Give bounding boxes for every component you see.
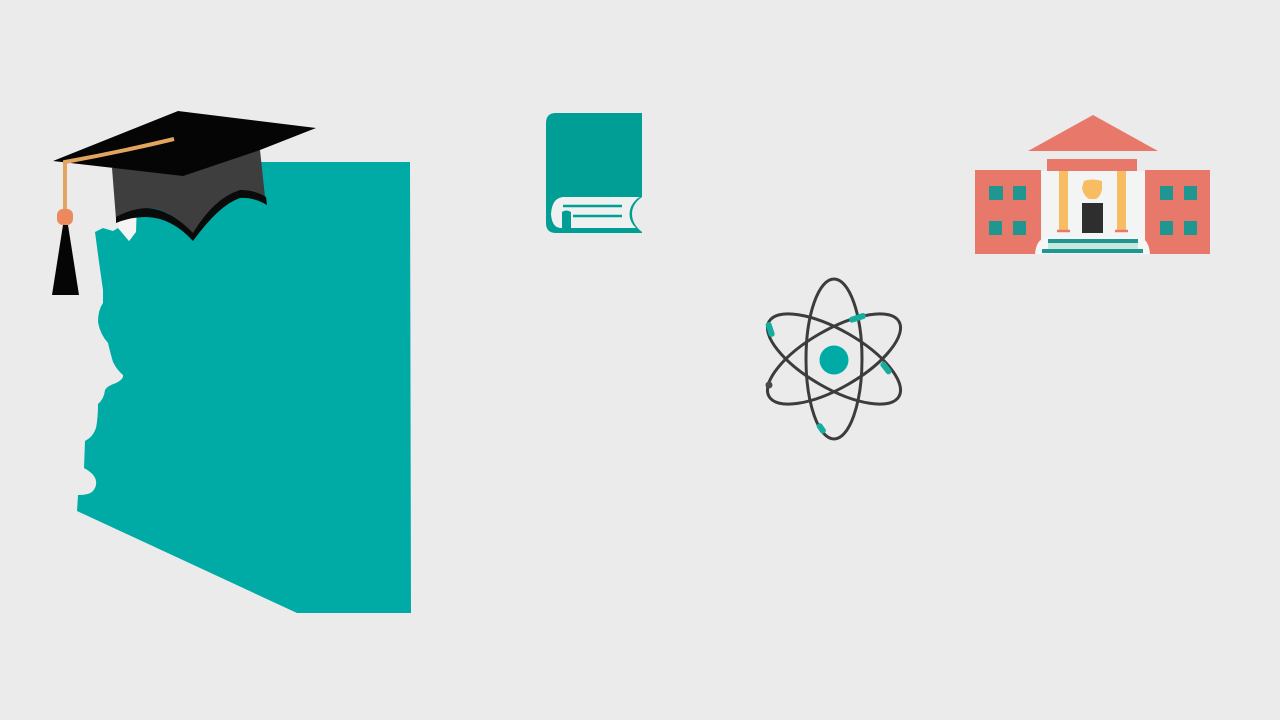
dark electron [766,382,772,388]
windows [989,186,1197,235]
tassel knot [57,209,73,225]
cap scalloped edge [116,190,267,241]
electrons [765,312,893,435]
icon: university building [975,115,1210,254]
icon: Arizona state map [77,162,411,613]
icon: atom [755,279,913,439]
steps [1035,237,1150,254]
right wing [1145,170,1210,254]
page lines [563,206,622,216]
tassel [52,225,79,295]
orbits [755,279,913,439]
beam [1047,159,1137,171]
book cover [546,113,642,233]
left wing [975,170,1041,254]
tassel cord [65,139,174,212]
book pages [551,197,640,228]
roof [1028,115,1158,151]
columns [1059,171,1126,230]
bookmark [562,210,571,229]
cap top board [53,111,316,176]
icon: graduation cap [52,111,316,295]
central hall [1041,171,1145,254]
cap light halo [118,200,137,241]
column bases [1057,230,1128,232]
cap body [112,150,265,234]
icon: book [546,113,642,233]
nucleus [820,346,848,374]
bust [1082,180,1102,199]
door [1082,203,1103,233]
